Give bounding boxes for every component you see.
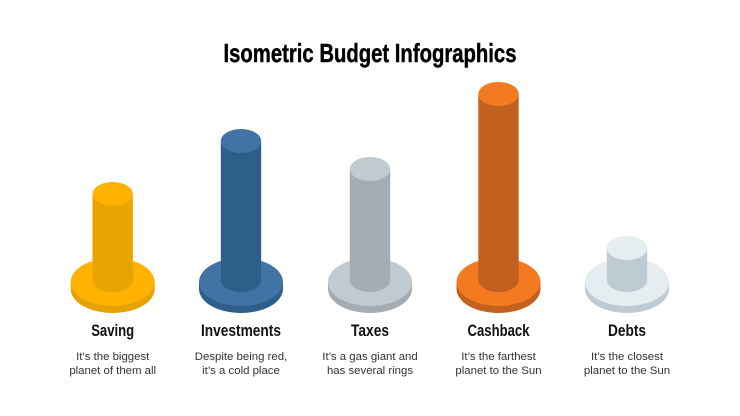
panel: saving [69, 182, 156, 377]
panel: investments [195, 129, 287, 377]
text: investments description: it’s a cold place [202, 365, 280, 377]
heading: taxes: Taxes [351, 322, 389, 340]
heading: debts: Debts [608, 322, 646, 340]
text: debts description: planet to the Sun [584, 365, 670, 377]
panel: taxes [322, 157, 418, 377]
title: Isometric Budget Infographics [224, 38, 516, 68]
text: cashback description: It’s the farthest [461, 351, 537, 363]
heading: investments: Investments [201, 322, 281, 340]
icon: debts cylinder [585, 236, 669, 313]
text: investments description: Despite being red, [195, 351, 287, 363]
text: debts description: It’s the closest [591, 351, 664, 363]
icon: taxes cylinder [328, 157, 412, 313]
panel: debts [584, 236, 670, 377]
heading: cashback: Cashback [468, 322, 530, 340]
text: taxes description: has several rings [327, 365, 413, 377]
icon: investments cylinder [199, 129, 283, 313]
text: cashback description: planet to the Sun [455, 365, 542, 377]
icon: saving cylinder [71, 182, 155, 313]
text: saving description: planet of them all [69, 365, 156, 377]
panel: cashback [455, 82, 542, 377]
text: taxes description: It’s a gas giant and [322, 351, 418, 363]
heading: saving: Saving [91, 322, 134, 340]
icon: cashback cylinder [456, 82, 540, 313]
text: saving description: It’s the biggest [76, 351, 150, 363]
